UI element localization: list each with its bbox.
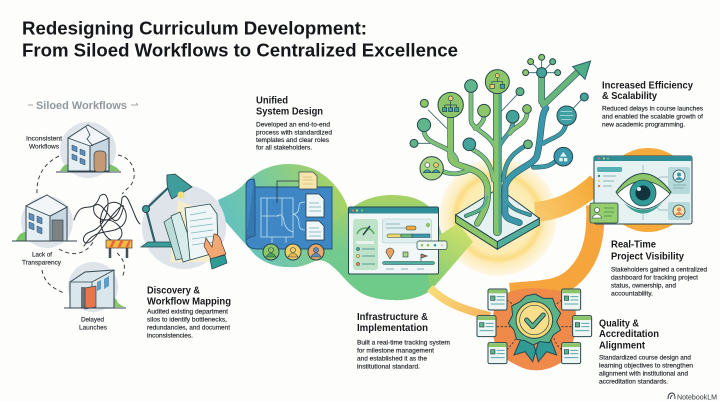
icon: eye	[616, 174, 671, 214]
text: real-time project visibility: Stakeholders gained a centralized	[611, 266, 707, 273]
label: lack of transparency: Transparency	[22, 260, 62, 266]
gauge card	[353, 219, 378, 270]
icon: tangled lines	[74, 194, 140, 246]
text: unified system design: for all stakeholders.	[256, 144, 312, 152]
title	[22, 18, 458, 61]
panel: dashboard	[348, 207, 447, 274]
title: From Siloed Workflows to Centralized Excellence	[22, 40, 458, 61]
text: quality and accreditation alignment: Accreditation	[599, 329, 659, 340]
text: unified system design: Unified	[256, 96, 288, 106]
icon: barricade	[106, 240, 132, 258]
icon: building inconsistent workflows	[56, 122, 121, 178]
text: discovery and workflow mapping	[147, 286, 231, 339]
text: infrastructure and implementation	[357, 312, 450, 370]
orange blob	[493, 288, 576, 370]
tree nodes	[410, 54, 588, 180]
text: increased efficiency and scalability: new academic programming.	[602, 121, 685, 128]
tree branches	[417, 57, 591, 232]
dashed loop connecting silos	[37, 155, 134, 293]
text: unified system design	[256, 96, 332, 152]
icon: quality badge	[477, 288, 592, 370]
ribbon	[514, 333, 557, 362]
text: quality and accreditation alignment	[599, 318, 693, 385]
text: infrastructure and implementation: Built a real-time tracking system	[357, 339, 450, 346]
text: real-time project visibility: status, ownership, and	[611, 282, 676, 289]
text: quality and accreditation alignment: accreditation standards.	[599, 378, 668, 385]
text: infrastructure and implementation: Implementation	[357, 323, 428, 334]
text: discovery and workflow mapping: Audited existing department	[147, 308, 228, 315]
text: infrastructure and implementation: Infrastructure &	[357, 312, 428, 323]
text: infrastructure and implementation: for milestone management	[357, 347, 434, 354]
text: real-time project visibility	[611, 240, 707, 297]
text: infrastructure and implementation: institutional standard.	[357, 363, 420, 370]
text: increased efficiency and scalability: & Scalability	[602, 91, 657, 102]
text: unified system design: templates and clear roles	[256, 137, 330, 144]
text: quality and accreditation alignment: alignment with institutional and	[599, 370, 688, 377]
card: user	[590, 203, 618, 223]
icon: building lack of transparency	[12, 195, 77, 248]
text: unified system design: process with standardized	[256, 129, 332, 136]
tree node icons	[423, 74, 573, 173]
icon: growth tree	[410, 54, 591, 249]
flow ribbons	[218, 164, 597, 316]
label: delayed launches	[79, 316, 108, 332]
text: infrastructure and implementation: and established it as the	[357, 355, 427, 362]
icon: lamp and documents	[141, 174, 227, 269]
text: quality and accreditation alignment: learning objectives to strengthen	[599, 362, 693, 369]
text: discovery and workflow mapping: Discovery &	[147, 286, 200, 296]
label: inconsistent workflows: Workflows	[29, 144, 60, 150]
tree base	[456, 188, 539, 249]
text: unified system design: System Design	[256, 106, 323, 118]
text: increased efficiency and scalability: Reduced delays in course launches	[602, 105, 704, 112]
icon: blueprint	[246, 172, 332, 260]
text: unified system design: Developed an end-to-end	[256, 121, 330, 128]
label: delayed launches: Delayed	[81, 316, 104, 324]
text: increased efficiency and scalability	[602, 80, 704, 128]
icon: tree halo	[439, 158, 557, 276]
document cards	[477, 289, 592, 364]
text: discovery and workflow mapping: silos to identify bottlenecks,	[147, 316, 227, 323]
label: inconsistent workflows: Inconsistent	[26, 136, 62, 142]
panel: orange blob behind eye	[604, 148, 692, 232]
panel: eye dashboard	[590, 156, 692, 224]
seal	[508, 294, 561, 345]
label: delayed launches: Launches	[79, 324, 108, 332]
text: real-time project visibility: Real-Time	[611, 240, 656, 250]
text: discovery and workflow mapping: Workflow Mapping	[147, 296, 231, 308]
siloed workflows heading: Siloed Workflows	[36, 100, 127, 112]
watermark: notebooklm: NotebookLM	[677, 392, 717, 402]
timeline cards	[382, 219, 434, 269]
text: quality and accreditation alignment: Alignment	[599, 340, 646, 352]
text: increased efficiency and scalability: and enabled the scalable growth of	[602, 113, 703, 120]
text: real-time project visibility: accountability.	[611, 290, 653, 297]
text: discovery and workflow mapping: inconsistencies.	[147, 332, 193, 339]
connectors	[497, 300, 573, 350]
label: inconsistent workflows	[26, 136, 62, 150]
title: Redesigning Curriculum Development:	[22, 18, 367, 38]
text: discovery and workflow mapping: redundancies, and document	[147, 324, 230, 331]
label: lack of transparency: Lack of	[32, 252, 52, 258]
text: quality and accreditation alignment: Quality &	[599, 318, 639, 330]
text: real-time project visibility: Project Visibility	[611, 251, 684, 262]
label: lack of transparency	[22, 252, 62, 266]
icon: building delayed launches	[64, 262, 126, 312]
text: increased efficiency and scalability: Increased Efficiency	[602, 80, 693, 92]
text: quality and accreditation alignment: Standardized course design and	[599, 354, 691, 361]
text: real-time project visibility: dashboard for tracking project	[611, 274, 698, 281]
status widget	[417, 241, 447, 250]
